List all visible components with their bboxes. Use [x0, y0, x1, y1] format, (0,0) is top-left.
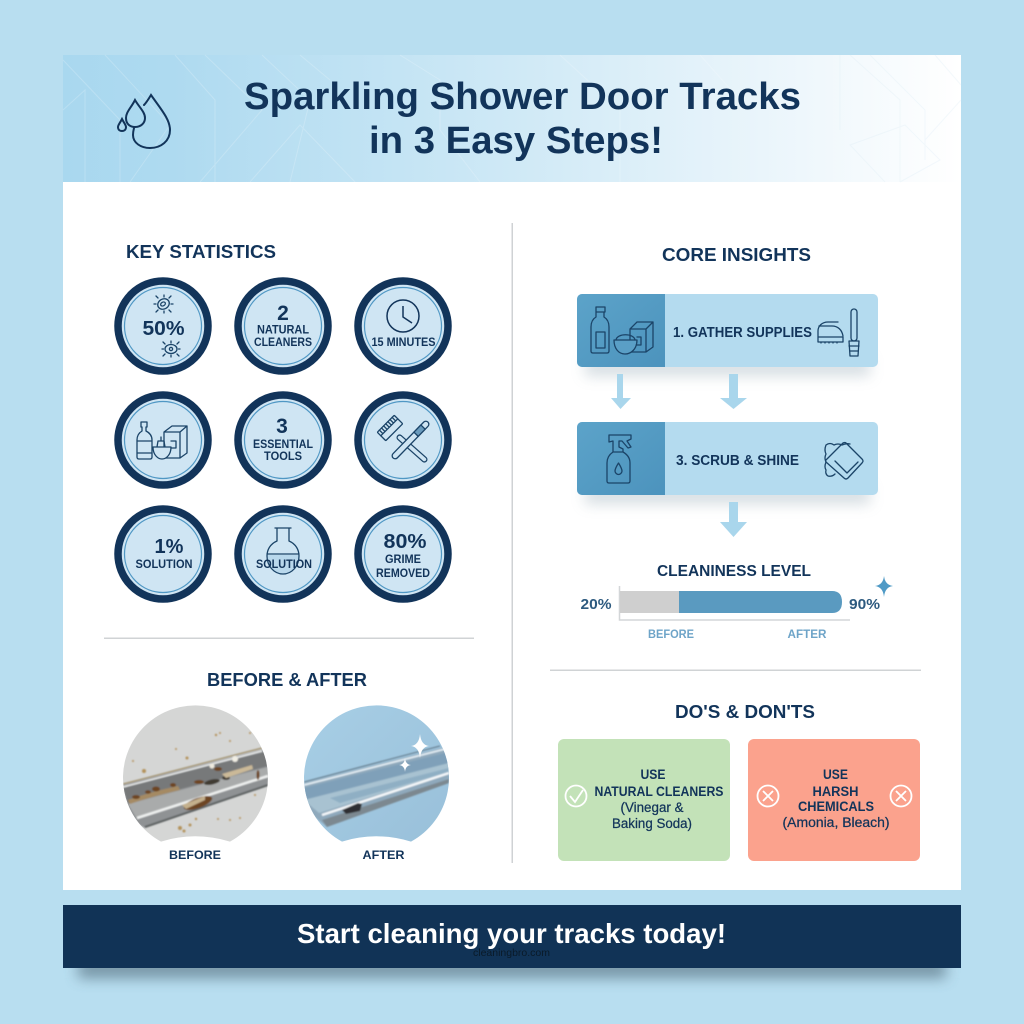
- stat: 3 essential tools: [238, 395, 328, 485]
- dont text: [782, 767, 890, 830]
- icon: check circle: [566, 786, 586, 806]
- left divider: [104, 638, 474, 639]
- stat: solution flask: [238, 509, 328, 599]
- heading: core insights: CORE INSIGHTS: [662, 245, 811, 265]
- step card: gather supplies: [577, 294, 878, 376]
- stat: solution flask: SOLUTION: [256, 557, 312, 571]
- stat: 2 natural cleaners: 2: [277, 302, 289, 325]
- photo: clean track: [304, 705, 449, 842]
- footer banner: [63, 905, 961, 968]
- stat: 15 minutes: 15 MINUTES: [372, 335, 436, 349]
- dont text: USE: [823, 767, 848, 782]
- title: [244, 76, 801, 162]
- label: after: AFTER: [788, 627, 827, 641]
- icon: bottle, bowl and box: [591, 307, 653, 354]
- icon: sparkles on clean track: [399, 734, 429, 772]
- panel: before and after: [120, 670, 452, 862]
- panel: core insights: [577, 245, 893, 641]
- header banner: [63, 55, 961, 182]
- axis: [620, 586, 850, 620]
- step text: 3: 3. SCRUB & SHINE: [676, 453, 799, 469]
- dont text: (Amonia, Bleach): [782, 815, 890, 830]
- title: in 3 Easy Steps!: [369, 120, 663, 162]
- right divider: [550, 670, 921, 671]
- footer shadow: [78, 960, 946, 978]
- value: 20%: 20%: [580, 596, 612, 613]
- heading: before and after: BEFORE & AFTER: [207, 670, 367, 690]
- stat: 80% grime removed: REMOVED: [376, 568, 430, 580]
- stat: 1% solution: SOLUTION: [136, 557, 192, 571]
- column divider: [512, 223, 513, 863]
- stat: 3 essential tools: ESSENTIAL: [253, 437, 313, 451]
- label: before: BEFORE: [648, 627, 694, 641]
- do text: USE: [640, 767, 666, 782]
- icon: water drops: [118, 95, 170, 148]
- stat: 1% solution: [118, 509, 208, 599]
- do text: (Vinegar &: [620, 800, 684, 815]
- watermark: cleaningbro.com: [473, 947, 550, 959]
- stat: 3 essential tools: 3: [276, 415, 288, 438]
- icon: spray bottle: [607, 435, 631, 483]
- stat: 1% solution: 1%: [155, 536, 184, 558]
- title: Sparkling Shower Door Tracks: [244, 76, 801, 118]
- do text: [594, 767, 724, 831]
- stat: 80% grime removed: 80%: [384, 531, 427, 553]
- icon: star sparkle: [875, 576, 893, 597]
- icon: cross circle right: [890, 786, 912, 806]
- dont text: CHEMICALS: [798, 799, 874, 814]
- panel: key statistics: [118, 242, 448, 599]
- bar: before value: [620, 591, 680, 613]
- step card: scrub and shine: [577, 422, 878, 504]
- card: dont: [748, 739, 920, 861]
- stat: supplies icon: [118, 395, 208, 485]
- card: do: [558, 739, 730, 861]
- step text: 1: 1. GATHER SUPPLIES: [673, 325, 812, 341]
- stat: 2 natural cleaners: [238, 281, 328, 371]
- icon: cloth: [825, 442, 863, 479]
- main white panel: [63, 55, 961, 890]
- arrow: center down: [720, 374, 747, 409]
- do text: Baking Soda): [612, 816, 692, 831]
- stat: 80% grime removed: [358, 509, 448, 599]
- heading: cleanliness level: CLEANINESS LEVEL: [657, 563, 811, 580]
- stat: 80% grime removed: GRIME: [385, 554, 421, 566]
- label: before: BEFORE: [169, 848, 221, 862]
- stat: 3 essential tools: TOOLS: [264, 449, 302, 463]
- dont text: HARSH: [812, 784, 858, 799]
- footer banner: Start cleaning your tracks today!: [297, 918, 726, 949]
- do text: NATURAL CLEANERS: [594, 784, 724, 799]
- stat: crossed brush tools: [358, 395, 448, 485]
- arrow: left down: [611, 374, 631, 409]
- bar: after value: [679, 591, 842, 613]
- stat: 50%: 50%: [142, 318, 185, 340]
- icon: scrub brush and bottle brush: [818, 309, 859, 356]
- stat: 50%: [118, 281, 208, 371]
- chart: cleanliness level: [580, 563, 893, 641]
- arrow: down to cleanliness: [720, 502, 747, 537]
- stat: 2 natural cleaners: NATURAL: [257, 322, 309, 336]
- stat: 2 natural cleaners: CLEANERS: [254, 335, 312, 349]
- icon: cross circle left: [758, 786, 778, 806]
- label: after: AFTER: [362, 848, 405, 862]
- heading: dos and donts: DO'S & DON'TS: [675, 702, 815, 722]
- stat: 15 minutes: [358, 281, 448, 371]
- value: 90%: 90%: [849, 596, 880, 613]
- photo: dirty track: [123, 705, 268, 842]
- heading: key statistics: KEY STATISTICS: [126, 242, 276, 262]
- panel: dos and donts: [558, 702, 920, 861]
